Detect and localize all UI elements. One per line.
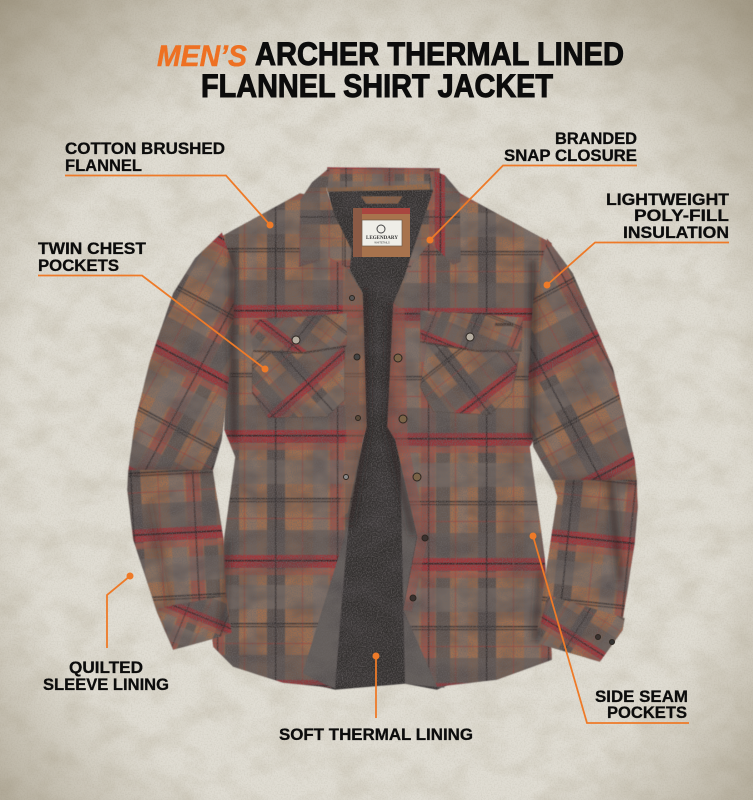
callout: quilted sleeve lining — [43, 572, 169, 694]
fabric placket right — [387, 303, 428, 612]
callout: quilted sleeve lining: QUILTED — [69, 659, 143, 677]
right sleeve — [528, 238, 638, 662]
left sleeve — [127, 232, 235, 650]
callout: cotton brushed flannel — [65, 140, 274, 228]
callout: soft thermal lining — [279, 652, 473, 744]
left collar — [299, 167, 352, 270]
callout: side seam pockets: SIDE SEAM — [595, 688, 688, 706]
title line 1: ARCHER THERMAL LINED — [255, 36, 624, 72]
callout: lightweight poly-fill insulation: POLY-FILL — [634, 207, 729, 225]
callout: lightweight poly-fill insulation: LIGHTWEIGHT — [606, 191, 729, 209]
neck label patch: WHITETAILS — [374, 240, 390, 244]
jacket — [127, 167, 638, 690]
callout: lightweight poly-fill insulation — [544, 191, 729, 288]
callout: cotton brushed flannel: FLANNEL — [65, 157, 142, 175]
left chest pocket — [248, 313, 347, 418]
callout: twin chest pockets: POCKETS — [38, 257, 119, 275]
callout: twin chest pockets — [38, 240, 268, 372]
callout: twin chest pockets: TWIN CHEST — [38, 240, 146, 258]
neck label patch: LEGENDARY — [366, 236, 398, 241]
right collar — [400, 168, 461, 290]
title line 2: FLANNEL SHIRT JACKET — [201, 68, 553, 104]
callout: lightweight poly-fill insulation: INSULATION — [623, 224, 729, 242]
callout: side seam pockets — [530, 532, 689, 723]
neck label patch — [353, 208, 410, 257]
snap buttons — [292, 296, 614, 644]
title — [157, 36, 624, 104]
seam shadows — [130, 250, 636, 640]
fabric placket left — [338, 262, 367, 520]
callout: branded snap closure: SNAP CLOSURE — [504, 147, 637, 165]
callout: branded snap closure — [426, 130, 637, 244]
callout: quilted sleeve lining: SLEEVE LINING — [43, 676, 169, 694]
callout: soft thermal lining: SOFT THERMAL LINING — [279, 726, 473, 744]
callout: side seam pockets: POCKETS — [607, 704, 687, 722]
thermal lining — [296, 178, 450, 690]
right chest pocket — [420, 310, 523, 415]
right torso panel — [387, 185, 552, 687]
title accent: MEN'S: MEN’S — [157, 40, 247, 73]
callout: cotton brushed flannel: COTTON BRUSHED — [65, 140, 225, 158]
callout: branded snap closure: BRANDED — [555, 130, 637, 148]
left torso panel — [212, 193, 367, 688]
back collar — [327, 167, 440, 204]
